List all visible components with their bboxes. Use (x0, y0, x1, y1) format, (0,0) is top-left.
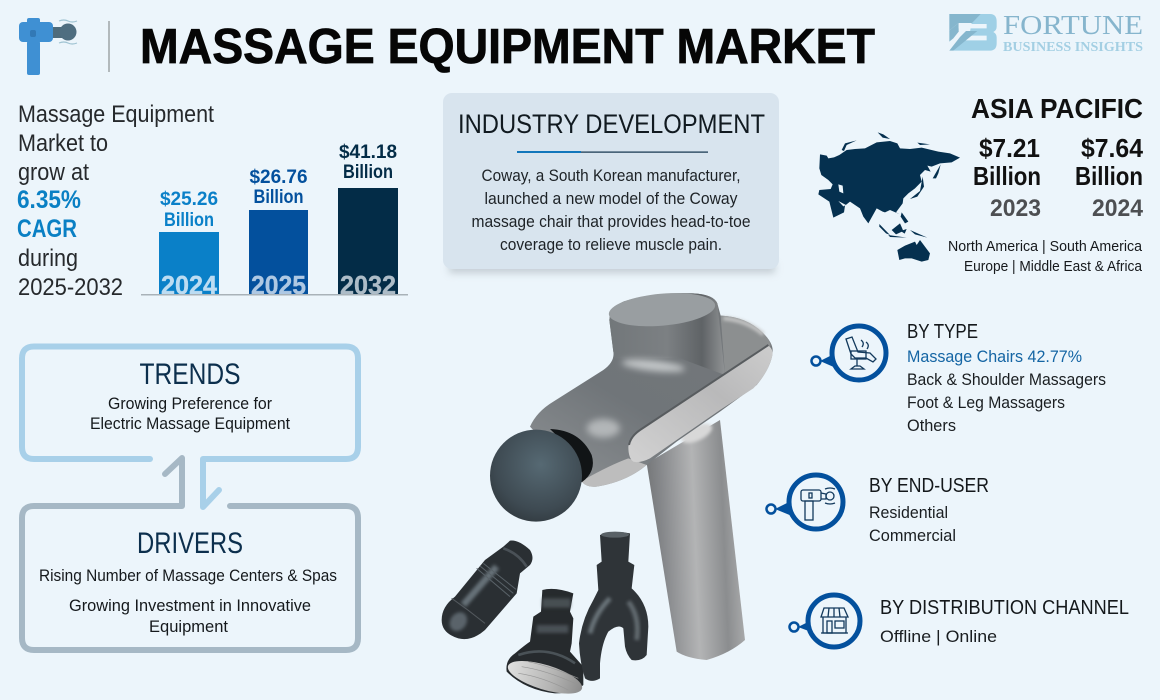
divider (108, 21, 110, 72)
segment: by distribution channel: BY DISTRIBUTION CHANNEL (880, 597, 1129, 619)
segment: by end-user: Residential (869, 503, 948, 522)
segment: by type (812, 321, 1106, 435)
segment: by end-user: Commercial (869, 526, 956, 545)
bar: 2032: 2032 (340, 270, 396, 300)
bar: 2024 (159, 189, 219, 300)
text block: massage chair that provides head-to-toe (472, 213, 750, 231)
attachments (442, 532, 648, 700)
panel: drivers: Growing Investment in Innovative (69, 597, 311, 615)
panel: drivers: Rising Number of Massage Centers & Spas (39, 567, 337, 585)
text block: CAGR statement: during (18, 245, 78, 272)
logo: Fortune Business Insights: BUSINESS INSIGHTS (1003, 40, 1143, 55)
heading: DRIVERS (137, 527, 243, 560)
bar: 2032: $41.18 (339, 142, 397, 163)
text block: CAGR statement: 6.35% (17, 186, 81, 214)
panel: trends: Electric Massage Equipment (90, 415, 290, 433)
heading: INDUSTRY DEVELOPMENT (458, 109, 765, 139)
logo: Fortune Business Insights: FORTUNE (1003, 10, 1143, 40)
text block: CAGR statement (17, 101, 214, 301)
bar: 2032: Billion (343, 162, 393, 183)
segment: by end-user: BY END-USER (869, 475, 989, 497)
bar: 2032 (338, 142, 398, 300)
text block: coverage to relieve muscle pain. (500, 236, 722, 254)
other regions (948, 239, 1143, 275)
bar: 2024: $25.26 (160, 189, 218, 210)
icon: storefront (790, 595, 860, 647)
attachment: flat head (504, 589, 586, 700)
text block: CAGR statement: grow at (18, 159, 89, 186)
gun handle (647, 420, 745, 660)
attachment: capsule (442, 541, 532, 639)
segment: by type: Others (907, 416, 956, 435)
attachment: fork (579, 532, 648, 681)
text block: launched a new model of the Coway (484, 190, 738, 208)
segment: by distribution channel: Offline | Online (880, 628, 997, 646)
segment: by end-user (766, 475, 989, 545)
bar chart (141, 142, 408, 300)
other regions: Europe | Middle East & Africa (964, 259, 1143, 275)
text block: Coway, a South Korean manufacturer, (482, 167, 740, 185)
icon: massage chair (812, 326, 886, 380)
bar: 2025: 2025 (251, 270, 306, 300)
segment: by type: Foot & Leg Massagers (907, 393, 1065, 412)
illustration: massage gun and attachments (442, 289, 773, 700)
text block: CAGR statement: CAGR (17, 215, 77, 243)
logo: Fortune Business Insights (949, 10, 1143, 55)
stat: 2024: $7.64 (1081, 133, 1144, 163)
segment: by type: Massage Chairs 42.77% (907, 347, 1082, 366)
panel: drivers (22, 458, 358, 650)
segment: by type: Back & Shoulder Massagers (907, 370, 1106, 389)
text block: CAGR statement: Market to (18, 130, 108, 157)
bar: 2025: Billion (254, 187, 304, 208)
other regions: North America | South America (948, 239, 1143, 255)
panel: trends: Growing Preference for (108, 395, 272, 413)
stat: 2023 (973, 133, 1041, 222)
text block: CAGR statement: 2025-2032 (18, 274, 123, 301)
segment: by distribution channel (790, 595, 1129, 647)
gun head (530, 289, 773, 487)
neck ring and massage ball (490, 429, 593, 522)
regional stats (948, 93, 1144, 275)
icon: massage gun header (19, 18, 77, 75)
map: Asia Pacific (818, 132, 960, 262)
stat: 2023: 2023 (990, 195, 1041, 222)
heading: TRENDS (140, 358, 240, 391)
stat: 2023: Billion (973, 161, 1041, 191)
stat: 2023: $7.21 (979, 133, 1040, 163)
stat: 2024 (1075, 133, 1144, 222)
heading: ASIA PACIFIC (971, 93, 1143, 124)
stat: 2024: 2024 (1092, 195, 1144, 222)
panel: drivers: Equipment (149, 618, 228, 636)
bar: 2024: Billion (164, 210, 214, 231)
stat: 2024: Billion (1075, 161, 1143, 191)
bar: 2025: $26.76 (249, 167, 308, 188)
icon: massage gun outline (766, 475, 843, 529)
text block (472, 167, 750, 254)
title: MASSAGE EQUIPMENT MARKET (140, 19, 875, 74)
bar: 2025 (249, 167, 308, 300)
bar: 2024: 2024 (161, 270, 218, 300)
panel: trends (22, 346, 358, 507)
text block: CAGR statement: Massage Equipment (18, 101, 214, 128)
panel: industry development (443, 93, 779, 273)
segment: by type: BY TYPE (907, 321, 978, 343)
